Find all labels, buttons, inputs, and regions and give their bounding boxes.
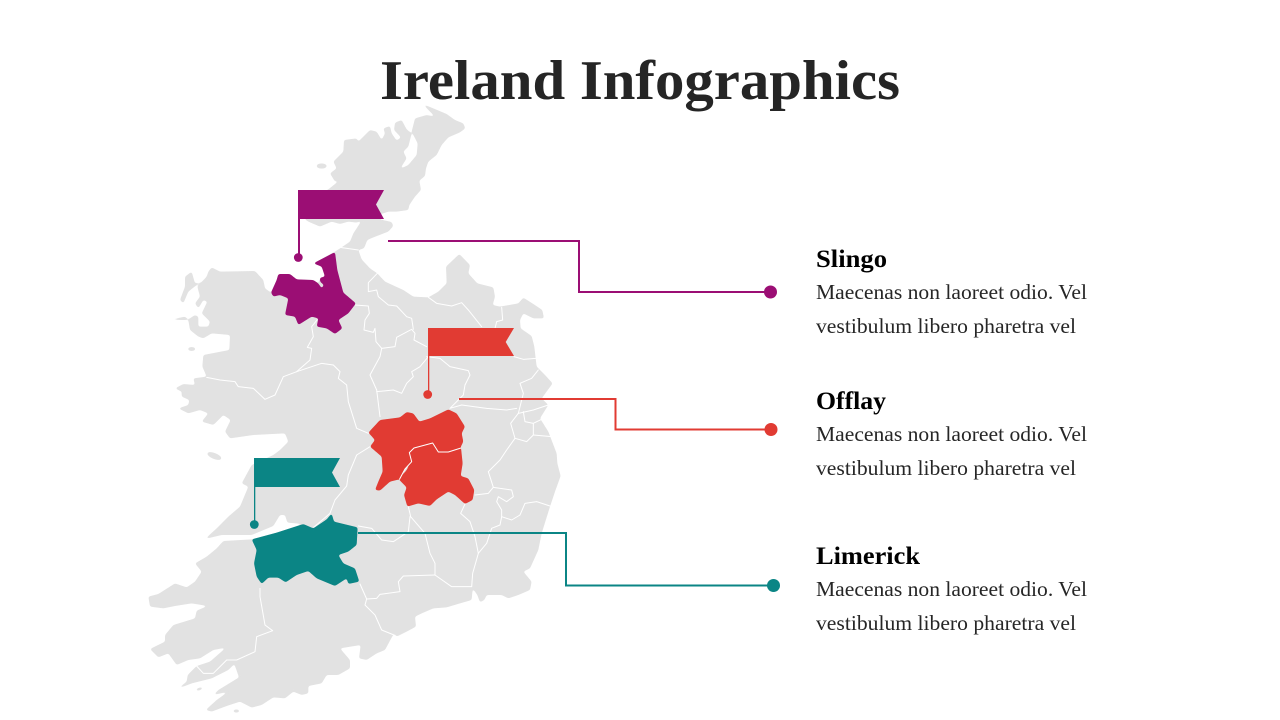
connector: Slingo [388,241,777,298]
text block: Offlay: vestibulum libero pharetra vel [816,456,1076,480]
text block: Limerick [816,543,1087,635]
title: Ireland Infographics [380,50,900,112]
text block: Slingo: Slingo [816,246,887,273]
text block: Limerick: Limerick [816,543,920,570]
text block: Slingo: vestibulum libero pharetra vel [816,314,1076,338]
land mass [148,104,561,713]
region: Offlay [368,409,474,507]
region: Limerick [252,513,359,586]
flag: Limerick [250,458,340,529]
text block: Slingo [816,246,1087,338]
text block: Offlay: Offlay [816,388,887,415]
map of Ireland [148,104,561,713]
text block: Limerick: vestibulum libero pharetra vel [816,611,1076,635]
flag: Slingo [294,190,384,262]
connector: Offlay [459,399,778,436]
text block: Offlay [816,388,1087,480]
text block: Offlay: Maecenas non laoreet odio. Vel [816,422,1087,446]
connector: Limerick [358,533,780,592]
flag: Offlay [423,328,514,399]
text block: Slingo: Maecenas non laoreet odio. Vel [816,280,1087,304]
region: Slingo [271,252,356,334]
text block: Limerick: Maecenas non laoreet odio. Vel [816,577,1087,601]
